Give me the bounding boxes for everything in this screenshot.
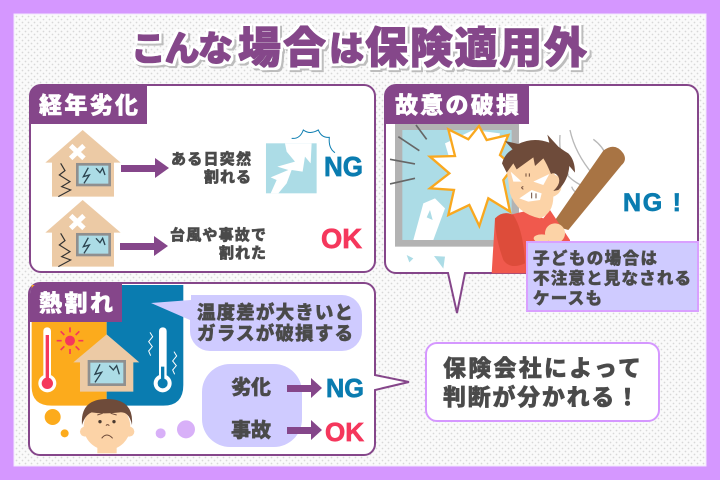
icon: hot thermometer [38, 327, 56, 392]
note: children may be judged careless [527, 242, 698, 311]
title: 保険適用外 [365, 14, 587, 76]
blob: deterioration and accident [202, 364, 302, 447]
text: cracked by typhoon or accident: 台風や事故で [170, 224, 266, 245]
label: OK: OK [321, 223, 362, 254]
heading: intentional damage: 故意の破損 [395, 86, 519, 120]
icon: worried man [80, 399, 134, 453]
label: NG: NG [324, 151, 363, 182]
blob: deterioration and accident: 劣化 [231, 371, 271, 400]
callout: depends on insurance company [426, 343, 659, 421]
icon: cracked house 2 [45, 200, 121, 267]
arrow: to typhoon or accident [120, 236, 168, 256]
panel: aging deterioration [30, 85, 375, 272]
text: cracked by typhoon or accident [170, 224, 266, 263]
callout: depends on insurance company: 判断が分かれる！ [443, 378, 639, 412]
panel: thermal cracking [29, 283, 409, 455]
icon: cracked glass [266, 130, 335, 193]
note: children may be judged careless: 不注意と見なされる [533, 265, 691, 289]
heading: aging deterioration: 経年劣化 [39, 86, 138, 120]
title: は [329, 21, 364, 72]
illustration: hot and cold sides with house [32, 285, 195, 453]
note: children may be judged careless: 子どもの場合は [533, 245, 658, 269]
text: one day suddenly cracks [171, 148, 251, 187]
label: OK: OK [325, 417, 364, 447]
icon: sun [57, 327, 83, 354]
icon: cold thermometer [154, 327, 172, 392]
icon: house with cracked window [73, 334, 139, 392]
blob: deterioration and accident: 事故 [231, 414, 271, 443]
text: cracked by typhoon or accident: 割れた [219, 242, 266, 263]
title: 場合 [238, 14, 326, 76]
arrow: accident to OK [287, 420, 322, 440]
callout: temperature difference: 温度差が大きいと [197, 299, 353, 325]
illustration: broken window [390, 123, 519, 269]
callout: temperature difference: ガラスが破損する [197, 320, 353, 346]
callout: depends on insurance company: 保険会社によって [443, 349, 641, 383]
label: NG: NG [326, 373, 364, 403]
title [131, 14, 587, 76]
panel: intentional damage [385, 85, 698, 313]
note: children may be judged careless: ケースも [533, 285, 602, 309]
illustration: boy swinging bat [492, 130, 625, 273]
label: NG!: NG ! [623, 189, 681, 217]
heading: thermal cracking: 熱割れ [39, 284, 113, 318]
callout: temperature difference [151, 295, 362, 351]
arrow: deterioration to NG [287, 378, 322, 398]
text: one day suddenly cracks: ある日突然 [171, 148, 251, 169]
title: こんな [131, 21, 233, 72]
arrow: to sudden crack [121, 158, 169, 178]
icon: cracked house 1 [45, 130, 121, 197]
text: one day suddenly cracks: 割れる [204, 166, 251, 187]
